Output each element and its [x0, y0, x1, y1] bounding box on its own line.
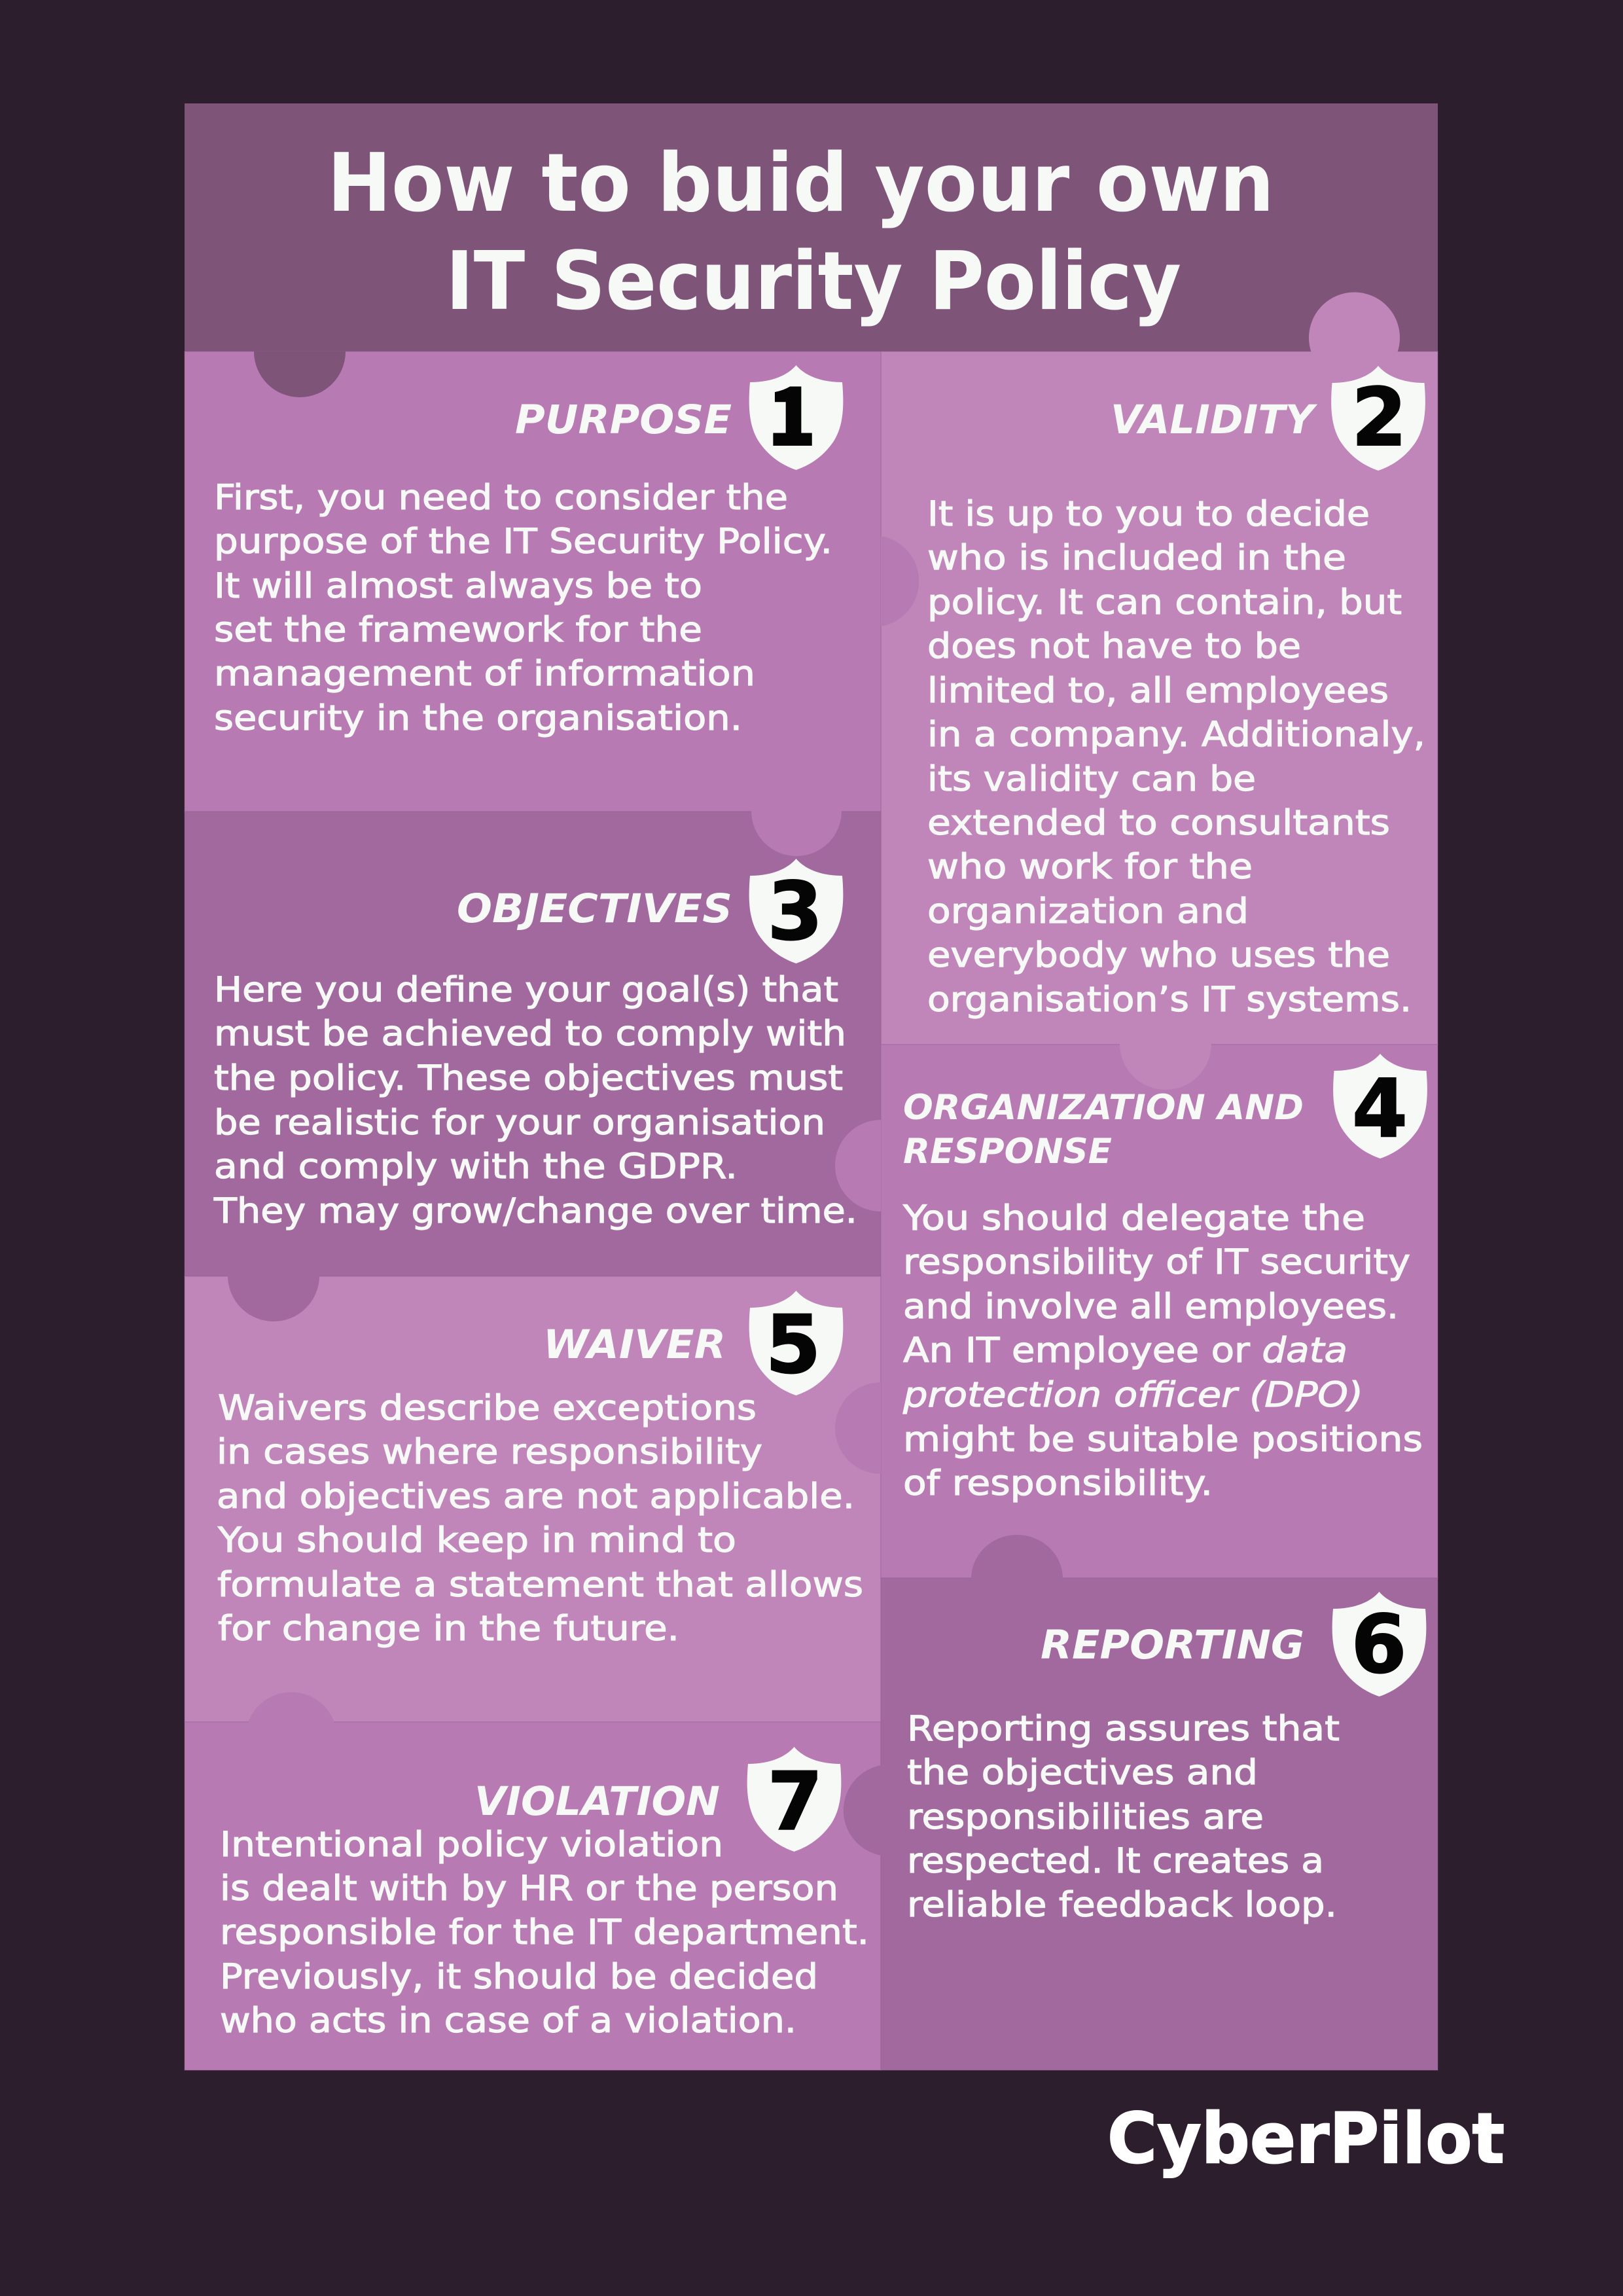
- text: objectives body: They may grow/change over time.: [213, 1191, 857, 1231]
- heading: organization and response: ORGANIZATION AND: [903, 1088, 1304, 1128]
- text: purpose body: security in the organisation.: [214, 698, 742, 738]
- text: validity body: everybody who uses the: [927, 935, 1390, 975]
- text: waiver body: and objectives are not applicable.: [217, 1477, 855, 1516]
- panel: violation: [185, 1722, 881, 2070]
- text: reporting body: the objectives and: [907, 1753, 1258, 1793]
- text: reporting body: [907, 1709, 1340, 1925]
- icon: shield 5: 5: [766, 1299, 821, 1391]
- icon: shield 1: [749, 353, 843, 470]
- text: validity body: who work for the: [927, 847, 1253, 887]
- text: violation body: Intentional policy violation: [220, 1825, 723, 1865]
- text: purpose body: set the framework for the: [214, 610, 702, 650]
- text: validity body: limited to, all employees: [927, 671, 1389, 711]
- text: purpose body: purpose of the IT Security Policy.: [214, 522, 832, 562]
- text: organization body: and involve all employees.: [903, 1287, 1399, 1327]
- panel: header with title: [185, 103, 1438, 351]
- text: reporting body: Reporting assures that: [907, 1709, 1340, 1749]
- heading: objectives: OBJECTIVES: [457, 886, 732, 932]
- text: organization body: of responsibility.: [903, 1463, 1213, 1503]
- icon: shield 4: [1333, 1054, 1427, 1158]
- text: reporting body: respected. It creates a: [907, 1841, 1324, 1881]
- text: waiver body: You should keep in mind to: [217, 1520, 736, 1560]
- title: [327, 137, 1274, 329]
- puzzle tabs: [228, 293, 1400, 1856]
- text: violation body: who acts in case of a violation.: [220, 2001, 796, 2041]
- text: purpose body: management of information: [214, 654, 755, 694]
- icon: shield 2: 2: [1351, 371, 1407, 464]
- icon: shield 7: 7: [768, 1755, 823, 1848]
- text: objectives body: the policy. These objectives must: [214, 1058, 843, 1098]
- text: reporting body: responsibilities are: [907, 1797, 1264, 1837]
- title: IT Security Policy: [446, 235, 1181, 329]
- icon: shield 4: 4: [1352, 1062, 1408, 1155]
- icon: shield 1: 1: [768, 353, 816, 469]
- text: waiver body: in cases where responsibility: [217, 1432, 762, 1472]
- text: violation body: Previously, it should be decided: [220, 1957, 818, 1997]
- text: validity body: organisation’s IT systems.: [927, 980, 1412, 1020]
- text: waiver body: formulate a statement that allows: [217, 1565, 863, 1605]
- text: validity body: policy. It can contain, but: [927, 583, 1402, 622]
- heading: purpose: PURPOSE: [515, 397, 732, 443]
- text: objectives body: Here you define your goal(s) that: [214, 970, 838, 1010]
- text: purpose body: First, you need to consider the: [214, 478, 788, 518]
- text: violation body: [220, 1825, 869, 2041]
- logo: CyberPilot: CyberPilot: [1107, 2098, 1505, 2179]
- panel: purpose: [185, 351, 881, 812]
- heading: organization and response: [903, 1088, 1304, 1172]
- panel: waiver: [185, 1276, 881, 1722]
- heading: reporting: REPORTING: [1041, 1622, 1304, 1668]
- text: organization body: might be suitable positions: [903, 1420, 1423, 1460]
- heading: validity: VALIDITY: [1111, 397, 1318, 443]
- icon: shield 2: [1331, 366, 1425, 471]
- text: objectives body: be realistic for your organisation: [214, 1103, 825, 1143]
- text: organization body: protection officer (DPO): [902, 1375, 1363, 1415]
- heading: organization and response: RESPONSE: [903, 1132, 1112, 1172]
- text: reporting body: reliable feedback loop.: [907, 1885, 1337, 1925]
- panel: validity: [881, 351, 1438, 1045]
- text: violation body: is dealt with by HR or the person: [220, 1869, 838, 1909]
- text: objectives body: [213, 970, 857, 1231]
- text: waiver body: [217, 1388, 863, 1649]
- text: validity body: organization and: [927, 891, 1249, 931]
- icon: shield 6: [1332, 1592, 1426, 1696]
- title: How to buid your own: [327, 137, 1274, 230]
- icon: shield 6: 6: [1351, 1598, 1406, 1691]
- text: objectives body: must be achieved to comply with: [214, 1014, 846, 1054]
- text: organization body: responsibility of IT security: [903, 1242, 1410, 1282]
- icon: shield 7: [747, 1747, 841, 1852]
- text: validity body: in a company. Additionaly,: [927, 715, 1425, 755]
- icon: shield 3: [749, 859, 843, 963]
- text: organization body: An IT employee or data: [903, 1331, 1347, 1371]
- text: validity body: [927, 494, 1425, 1020]
- text: validity body: does not have to be: [927, 626, 1301, 666]
- text: purpose body: [214, 478, 832, 738]
- text: validity body: It is up to you to decide: [927, 494, 1370, 534]
- panel: objectives: [185, 812, 881, 1276]
- icon: shield 5: [749, 1291, 843, 1395]
- text: waiver body: Waivers describe exceptions: [218, 1388, 757, 1428]
- heading: violation: VIOLATION: [474, 1778, 720, 1825]
- text: validity body: extended to consultants: [927, 803, 1390, 843]
- heading: waiver: WAIVER: [543, 1321, 726, 1368]
- text: violation body: responsible for the IT department.: [220, 1912, 869, 1952]
- text: waiver body: for change in the future.: [218, 1609, 679, 1649]
- panel: reporting: [881, 1578, 1438, 2070]
- text: organization body: You should delegate the: [902, 1198, 1365, 1238]
- panel: organization and response: [881, 1045, 1438, 1578]
- icon: shield 3: 3: [768, 865, 823, 958]
- text: organization body: [902, 1198, 1423, 1503]
- text: validity body: who is included in the: [927, 538, 1346, 578]
- text: purpose body: It will almost always be to: [214, 566, 702, 606]
- text: validity body: its validity can be: [927, 759, 1256, 799]
- text: objectives body: and comply with the GDPR.: [214, 1147, 738, 1187]
